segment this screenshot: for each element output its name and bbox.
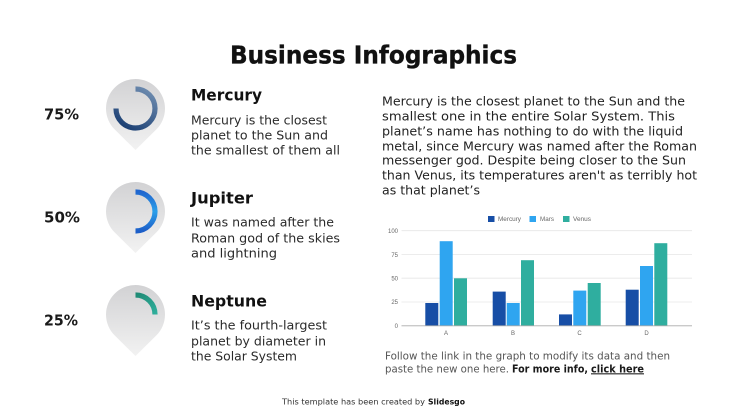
y axis labels: 50	[391, 276, 399, 282]
text: Jupiter description: It was named after the	[191, 215, 334, 229]
y axis labels: 100	[388, 229, 399, 235]
title: Business Infographics	[230, 40, 517, 69]
text: Mercury paragraph: metal, since Mercury was named after the Roman	[382, 139, 697, 153]
legend	[488, 216, 591, 223]
y axis labels: 75	[391, 253, 399, 259]
text: chart note: Follow the link in the graph to modify its data and then	[385, 350, 670, 362]
text: chart note: paste the new one here.	[385, 363, 509, 375]
text: Mercury paragraph	[382, 94, 697, 197]
x axis labels: D	[644, 331, 649, 337]
item: Mercury	[44, 79, 340, 157]
text: Neptune description: the Solar System	[191, 349, 297, 363]
text: Mercury description: Mercury is the closest	[191, 113, 327, 127]
y axis labels: 0	[395, 324, 399, 330]
bars: Venus series	[454, 243, 667, 326]
bars: Mercury series	[425, 290, 639, 326]
text: Mercury paragraph: messenger god. Despite being closer to the Sun	[382, 153, 686, 167]
heading: Mercury: Mercury	[191, 85, 263, 104]
x axis labels: C	[577, 331, 582, 337]
percentage: 50%: 50%	[44, 208, 80, 226]
text: Jupiter description: and lightning	[191, 246, 277, 260]
heading: Jupiter: Jupiter	[190, 188, 253, 207]
percentage: 25%: 25%	[44, 311, 78, 329]
legend: Mercury	[498, 217, 521, 223]
text: Neptune description: It’s the fourth-largest	[191, 318, 327, 332]
text: Mercury paragraph: smallest one in the entire Solar System. This	[382, 109, 675, 123]
text: Mercury paragraph: than Venus, its temperatures aren't as terribly hot	[382, 168, 697, 182]
icon: pin with 75% ring	[106, 79, 165, 150]
text: Neptune description	[191, 318, 327, 363]
item: Jupiter	[44, 182, 340, 260]
legend: Venus	[573, 217, 591, 223]
bar chart	[388, 216, 692, 337]
icon: pin with 50% ring	[106, 182, 165, 253]
text: Mercury description	[191, 113, 340, 157]
heading: Neptune: Neptune	[191, 291, 267, 310]
y axis labels	[388, 229, 399, 330]
bars: Mars series	[440, 241, 653, 326]
icon: pin with 25% ring	[106, 285, 165, 356]
x axis labels: A	[444, 331, 448, 337]
legend: Mars	[540, 217, 554, 223]
text: Jupiter description	[191, 215, 340, 260]
footer credit: Slidesgo	[428, 397, 465, 406]
text: chart note	[385, 350, 670, 375]
text: Mercury description: planet to the Sun and	[191, 128, 328, 142]
text: Mercury paragraph: Mercury is the closest planet to the Sun and the	[382, 94, 685, 108]
text: Jupiter description: Roman god of the skies	[191, 231, 340, 245]
footer credit: This template has been created by	[281, 397, 426, 406]
y axis labels: 25	[391, 300, 399, 306]
text: Mercury description: the smallest of them all	[191, 143, 340, 157]
item: Neptune	[44, 285, 327, 363]
percentage: 75%: 75%	[44, 105, 79, 123]
text: Neptune description: planet by diameter in	[191, 334, 326, 348]
text: chart note: For more info,	[512, 363, 588, 375]
text: Mercury paragraph: as that planet’s	[382, 183, 480, 197]
x axis labels	[444, 331, 649, 337]
text: chart note: click here	[591, 363, 644, 375]
x axis labels: B	[511, 331, 515, 337]
text: Mercury paragraph: planet’s name has nothing to do with the liquid	[382, 124, 683, 138]
